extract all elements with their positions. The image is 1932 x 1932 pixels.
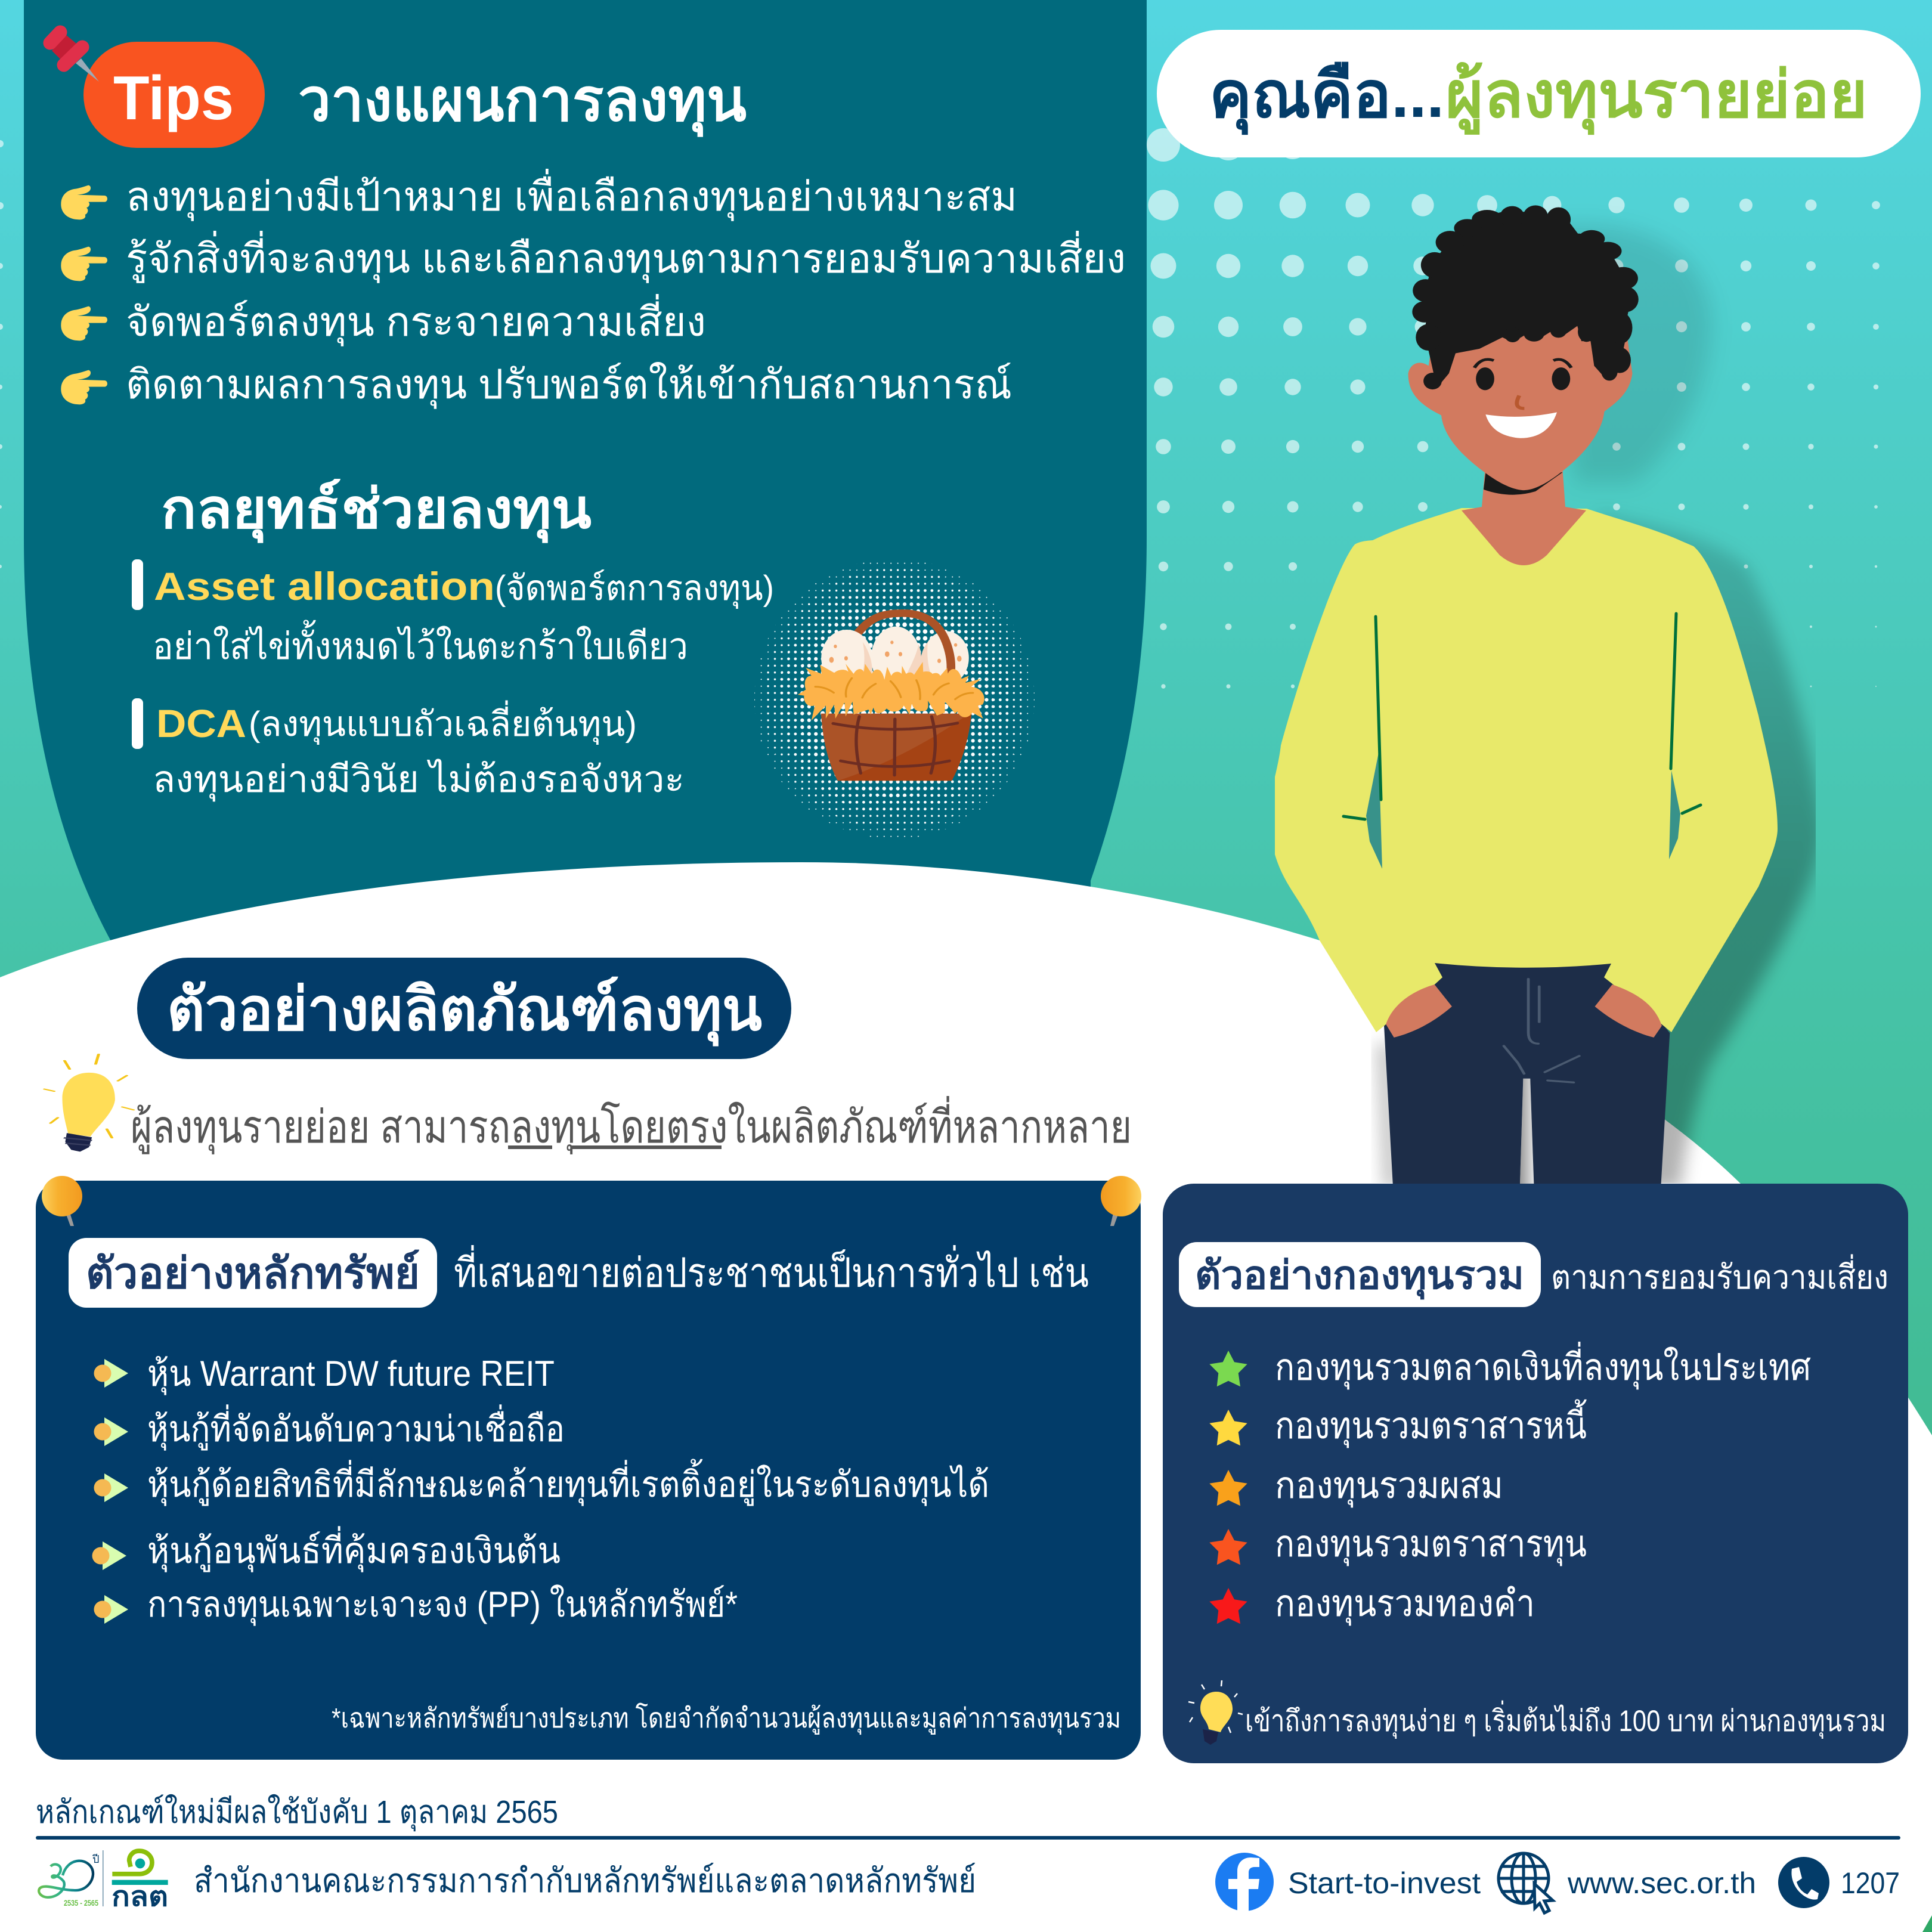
- dot pattern background: [0, 128, 1880, 689]
- sweater: [1275, 508, 1778, 1032]
- icon: left pin: [42, 1176, 82, 1226]
- face details: [1475, 360, 1571, 438]
- icon: red-orange star: [1209, 1529, 1247, 1565]
- securities intro text: ที่เสนอขายต่อประชาชนเป็นการทั่วไป เช่น: [454, 1245, 1089, 1296]
- icon: pointing hand: [61, 306, 107, 340]
- icon: right pin: [1101, 1176, 1141, 1226]
- title text: คุณคือ...: [1209, 58, 1444, 135]
- DCA description: ลงทุนอย่างมีวินัย ไม่ต้องรอจังหวะ: [153, 758, 685, 801]
- footer rule: [36, 1836, 1900, 1840]
- asset allocation description: อย่าใส่ไข่ทั้งหมดไว้ในตะกร้าใบเดียว: [153, 620, 688, 667]
- icon: green star: [1209, 1351, 1247, 1386]
- bottom-right corner sliver: [1922, 1915, 1932, 1932]
- DCA translation: (ลงทุนแบบถัวเฉลี่ยต้นทุน): [249, 700, 637, 745]
- icon: red star: [1209, 1588, 1247, 1624]
- bullet marker: [94, 1595, 128, 1624]
- title pill: [1157, 30, 1921, 157]
- icon: small light bulb: [1188, 1680, 1243, 1745]
- Tips badge: [83, 42, 265, 148]
- organisation name: สำนักงานคณะกรรมการกำกับหลักทรัพย์และตลาดหลักทรัพย์: [194, 1862, 976, 1899]
- illustration: smiling retail investor: [1275, 205, 1778, 1187]
- tips list: [61, 169, 1126, 409]
- bullet marker: [94, 1359, 128, 1388]
- asset allocation label: Asset allocation: [154, 564, 495, 608]
- fund intro text: ตามการยอมรับความเสี่ยง: [1551, 1254, 1888, 1296]
- icon: yellow star: [1209, 1410, 1247, 1445]
- icon: pointing hand: [61, 247, 107, 281]
- DCA label: DCA: [156, 701, 246, 745]
- Tips heading: [50, 32, 747, 148]
- halftone circle behind basket: [754, 559, 1035, 839]
- fund label: [1179, 1242, 1541, 1307]
- fund item 3: กองทุนรวมผสม: [1275, 1465, 1503, 1507]
- head: [1408, 205, 1639, 495]
- drop shadow of the figure: [1377, 224, 1823, 1190]
- website address: www.sec.or.th: [1567, 1866, 1756, 1900]
- logo divider and SEC mark: [103, 1850, 168, 1912]
- panel: tips top teal panel: [24, 0, 1147, 966]
- bullet marker: [92, 1541, 126, 1570]
- securities label: ตัวอย่างหลักทรัพย์: [86, 1249, 420, 1298]
- Tips label: Tips: [113, 64, 234, 133]
- heading: plan investing: วางแผนการลงทุน: [298, 67, 747, 137]
- security item 2: หุ้นกู้ที่จัดอันดับความน่าเชื่อถือ: [147, 1404, 565, 1451]
- hotline number: 1207: [1841, 1866, 1900, 1900]
- icon: push pin: [50, 32, 99, 82]
- accent bar: [132, 559, 143, 610]
- tip text 2: รู้จักสิ่งที่จะลงทุน และเลือกลงทุนตามการยอมรับความเสี่ยง: [126, 231, 1126, 283]
- sweater seams: [1343, 614, 1701, 819]
- icon: pointing hand: [61, 185, 107, 219]
- title highlighted text: ผู้ลงทุนรายย่อย: [1445, 58, 1868, 135]
- bullet marker: [94, 1417, 128, 1446]
- tip text 4: ติดตามผลการลงทุน ปรับพอร์ตให้เข้ากับสถานการณ์: [126, 361, 1012, 409]
- bullet marker: [94, 1473, 128, 1502]
- section heading text: ตัวอย่างผลิตภัณฑ์ลงทุน: [167, 976, 762, 1046]
- security item 3: หุ้นกู้ด้อยสิทธิที่มีลักษณะคล้ายทุนที่เรตติ้งอยู่ในระดับลงทุนได้: [147, 1459, 989, 1506]
- security item 5: การลงทุนเฉพาะเจาะจง (PP) ในหลักทรัพย์*: [147, 1584, 738, 1626]
- icon: pointing hand: [61, 370, 107, 404]
- effective date note: หลักเกณฑ์ใหม่มีผลใช้บังคับ 1 ตุลาคม 2565: [36, 1794, 558, 1832]
- tip text 1: ลงทุนอย่างมีเป้าหมาย เพื่อเลือกลงทุนอย่างเหมาะสม: [126, 169, 1017, 221]
- subtitle text: ผู้ลงทุนรายย่อย สามารถลงทุนโดยตรงในผลิตภัณฑ์ที่หลากหลาย: [131, 1096, 1132, 1154]
- neck: [1462, 465, 1586, 565]
- strategy heading: กลยุทธ์ช่วยลงทุน: [161, 478, 592, 543]
- logo: 30 years anniversary: ปี: [92, 1853, 99, 1865]
- white swoosh background: [0, 862, 1932, 1932]
- tip text 3: จัดพอร์ตลงทุน กระจายความเสี่ยง: [126, 294, 706, 346]
- SEC logotype: กลต: [112, 1881, 168, 1912]
- facebook handle: Start-to-invest: [1288, 1866, 1481, 1900]
- logo: 30 years anniversary: 2535 - 2565: [64, 1898, 98, 1908]
- icon: globe with cursor: [1498, 1853, 1553, 1913]
- section heading pill: [137, 958, 791, 1059]
- securities label: [69, 1238, 437, 1308]
- panel: securities examples: [36, 1176, 1141, 1760]
- fund item 1: กองทุนรวมตลาดเงินที่ลงทุนในประเทศ: [1275, 1342, 1811, 1389]
- strategy section: [132, 478, 774, 801]
- panel: mutual fund examples: [1163, 1184, 1908, 1763]
- icon: phone: [1778, 1857, 1829, 1908]
- icon: facebook: [1215, 1853, 1274, 1911]
- icon: orange star: [1209, 1470, 1247, 1506]
- security item 4: หุ้นกู้อนุพันธ์ที่คุ้มครองเงินต้น: [147, 1526, 561, 1572]
- hands in pockets: [1386, 984, 1662, 1038]
- hair: [1412, 205, 1639, 389]
- security item 1: หุ้น Warrant DW future REIT: [147, 1354, 555, 1395]
- asset allocation translation: (จัดพอร์ตการลงทุน): [495, 569, 774, 609]
- fund item 4: กองทุนรวมตราสารทุน: [1275, 1524, 1587, 1566]
- fund label: ตัวอย่างกองทุนรวม: [1195, 1253, 1524, 1300]
- footnote: *เฉพาะหลักทรัพย์บางประเภท โดยจำกัดจำนวนผู้ลงทุนและมูลค่าการลงทุนรวม: [332, 1702, 1121, 1735]
- fund item 2: กองทุนรวมตราสารหนี้: [1275, 1399, 1587, 1448]
- logo: 30 years anniversary: [39, 1853, 99, 1908]
- sleeve gaps: [1366, 753, 1382, 869]
- fund item 5: กองทุนรวมทองคำ: [1275, 1583, 1535, 1626]
- icon: egg basket: [798, 613, 984, 781]
- pants: [1384, 961, 1670, 1187]
- icon: light bulb: [45, 1054, 134, 1151]
- accent bar: [132, 698, 143, 749]
